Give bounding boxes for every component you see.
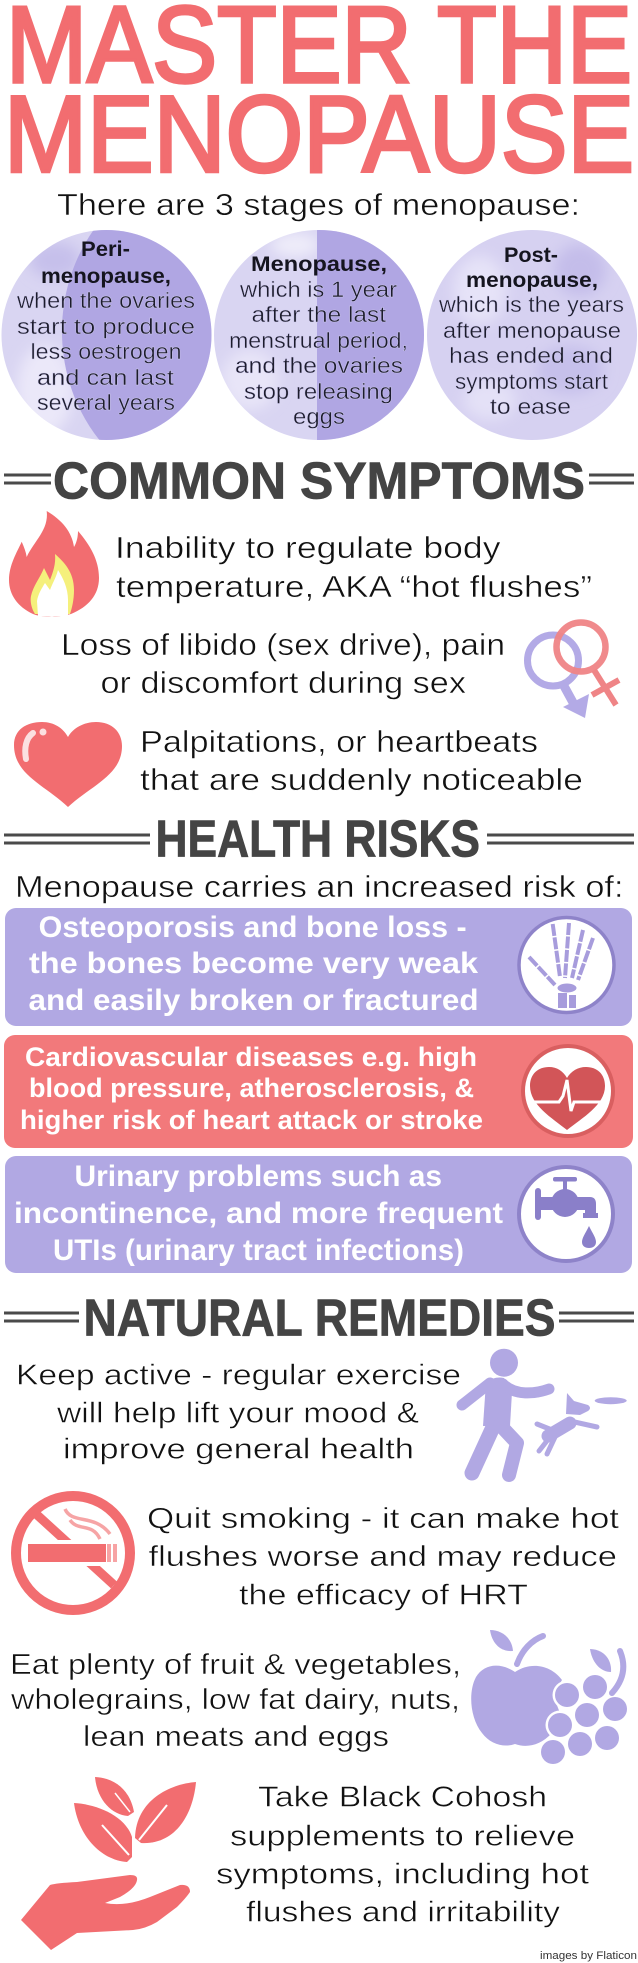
heading: health risks bbox=[4, 810, 634, 868]
stage text: postmenopause: after menopause bbox=[443, 318, 621, 343]
stage text: menopause: which is 1 year bbox=[239, 277, 397, 302]
icon: apple and grapes bbox=[471, 1630, 627, 1764]
stage text: menopause: after the last bbox=[252, 302, 386, 327]
remedy text: exercise: Keep active - regular exercise bbox=[16, 1360, 461, 1392]
stage text: postmenopause: symptoms start bbox=[455, 369, 608, 394]
stage text: postmenopause bbox=[438, 244, 624, 419]
risk text: osteoporosis: Osteoporosis and bone loss - bbox=[39, 911, 467, 944]
icon: person and dog with frisbee bbox=[462, 1349, 627, 1475]
stage text: perimenopause: when the ovaries bbox=[16, 288, 195, 313]
stage text: menopause: eggs bbox=[293, 404, 345, 429]
symptom text: palpitations: that are suddenly noticeable bbox=[140, 762, 583, 797]
remedy text: black cohosh: Take Black Cohosh bbox=[258, 1782, 547, 1814]
symptom text: libido: or discomfort during sex bbox=[100, 665, 467, 700]
remedy text: diet: wholegrains, low fat dairy, nuts, bbox=[10, 1684, 460, 1716]
stage text: perimenopause: menopause, bbox=[41, 265, 171, 288]
stage text: menopause: menstrual period, bbox=[229, 328, 408, 353]
stage text: postmenopause: Post- bbox=[504, 244, 558, 267]
credit: images by Flaticon bbox=[540, 1950, 637, 1962]
stage text: menopause: stop releasing bbox=[244, 379, 393, 404]
symptom text: libido bbox=[61, 627, 505, 700]
icon: gender symbols bbox=[528, 622, 619, 718]
stage text: perimenopause bbox=[16, 238, 195, 415]
remedy text: diet: lean meats and eggs bbox=[83, 1721, 389, 1753]
panel: perimenopause moon bbox=[2, 228, 220, 442]
stage text: menopause bbox=[229, 253, 408, 429]
remedy text: black cohosh bbox=[216, 1782, 589, 1928]
risk text: urinary bbox=[14, 1160, 503, 1267]
remedy text: smoking bbox=[147, 1503, 619, 1612]
risk text: osteoporosis: and easily broken or fractured bbox=[28, 984, 478, 1017]
icon: hand with leaves bbox=[21, 1777, 196, 1950]
remedy text: black cohosh: symptoms, including hot bbox=[216, 1858, 589, 1890]
risk text: cardiovascular: higher risk of heart attack or stroke bbox=[20, 1105, 483, 1135]
stage text: postmenopause: which is the years bbox=[438, 292, 624, 317]
heading: common symptoms: COMMON SYMPTOMS bbox=[53, 452, 585, 510]
remedy text: smoking: flushes worse and may reduce bbox=[148, 1541, 617, 1573]
title bbox=[4, 0, 634, 196]
risk text: cardiovascular bbox=[20, 1042, 483, 1135]
icon: dripping tap bbox=[519, 1167, 613, 1261]
stage text: perimenopause: start to produce bbox=[17, 314, 195, 339]
risk text: cardiovascular: Cardiovascular diseases e.g. high bbox=[25, 1042, 477, 1072]
remedy text: smoking: Quit smoking - it can make hot bbox=[147, 1503, 619, 1535]
heading: natural remedies: NATURAL REMEDIES bbox=[84, 1290, 556, 1348]
stage text: postmenopause: menopause, bbox=[466, 269, 598, 292]
remedy text: diet bbox=[10, 1649, 461, 1753]
remedy text: exercise: will help lift your mood & bbox=[56, 1398, 419, 1430]
symptom text: temperature bbox=[115, 530, 592, 604]
risk text: urinary: Urinary problems such as bbox=[74, 1160, 442, 1193]
panel: cardiovascular bbox=[4, 1035, 633, 1148]
stage text: postmenopause: to ease bbox=[490, 394, 571, 419]
icon: no smoking bbox=[16, 1496, 130, 1610]
symptom text: libido: Loss of libido (sex drive), pain bbox=[61, 627, 505, 662]
stage text: postmenopause: has ended and bbox=[449, 343, 613, 368]
icon: hand bones bbox=[519, 918, 614, 1012]
heading: health risks: HEALTH RISKS bbox=[156, 810, 480, 868]
risk text: osteoporosis: the bones become very weak bbox=[29, 947, 478, 980]
stage text: menopause: Menopause, bbox=[251, 253, 387, 276]
symptom text: temperature: temperature, AKA “hot flushes” bbox=[116, 569, 592, 604]
risk text: cardiovascular: blood pressure, atherosclerosis, & bbox=[29, 1073, 474, 1103]
stage text: perimenopause: less oestrogen bbox=[30, 339, 182, 364]
intro text: risks: Menopause carries an increased risk of: bbox=[15, 869, 624, 904]
stage text: perimenopause: Peri- bbox=[81, 238, 130, 261]
symptom text: palpitations bbox=[140, 724, 583, 797]
risk text: urinary: incontinence, and more frequent bbox=[14, 1197, 503, 1230]
risk text: osteoporosis bbox=[28, 911, 478, 1017]
remedy text: exercise bbox=[16, 1360, 461, 1466]
icon: flame bbox=[9, 511, 99, 616]
panel: urinary bbox=[5, 1156, 632, 1273]
stage text: perimenopause: several years bbox=[37, 390, 175, 415]
remedy text: diet: Eat plenty of fruit & vegetables, bbox=[10, 1649, 461, 1681]
remedy text: black cohosh: supplements to relieve bbox=[230, 1820, 575, 1852]
icon: heart with pulse bbox=[523, 1046, 613, 1136]
panel: postmenopause moon bbox=[427, 230, 637, 440]
symptom text: palpitations: Palpitations, or heartbeats bbox=[140, 724, 538, 759]
symptom text: temperature: Inability to regulate body bbox=[115, 530, 501, 565]
risk text: urinary: UTIs (urinary tract infections) bbox=[53, 1234, 464, 1267]
stage text: menopause: and the ovaries bbox=[235, 353, 403, 378]
icon: heart bbox=[14, 722, 122, 807]
panel: osteoporosis bbox=[5, 908, 632, 1026]
stage text: perimenopause: and can last bbox=[37, 365, 174, 390]
remedy text: black cohosh: flushes and irritability bbox=[246, 1896, 561, 1928]
intro text: stages: There are 3 stages of menopause: bbox=[57, 187, 580, 222]
panel: menopause moon bbox=[214, 228, 427, 442]
remedy text: smoking: the efficacy of HRT bbox=[239, 1580, 528, 1612]
remedy text: exercise: improve general health bbox=[63, 1434, 414, 1466]
